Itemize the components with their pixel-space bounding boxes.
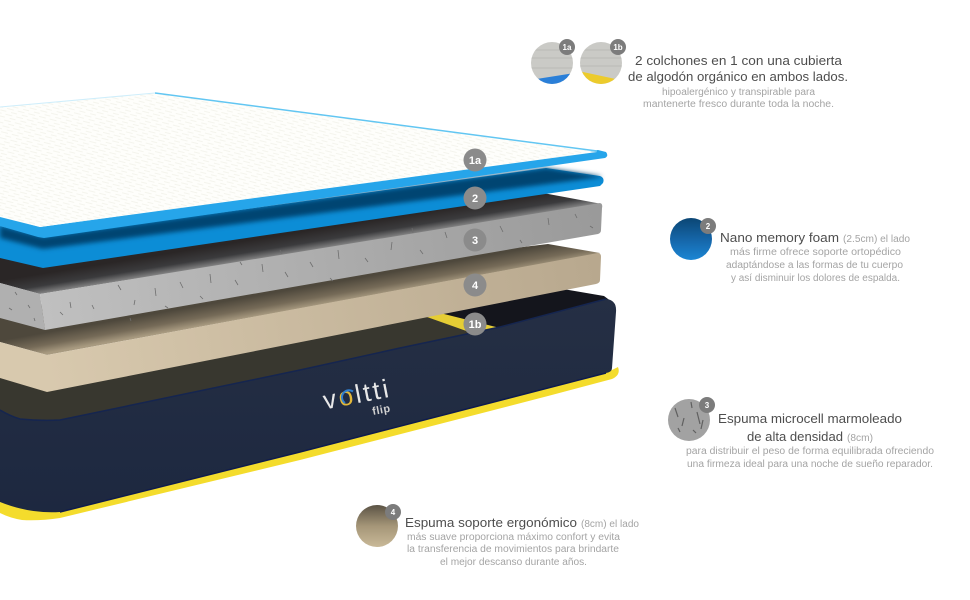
icon: cover swatch 1a: [531, 39, 575, 84]
callout text: memory foam: [720, 231, 910, 284]
callout text: microcell: Espuma microcell marmoleado: [718, 412, 902, 426]
icon: ergonomic foam swatch: 4: [391, 508, 396, 517]
marker 3: 3: [472, 235, 478, 247]
marker 1b: [464, 312, 486, 336]
icon: microcell swatch: 3: [705, 401, 710, 410]
callout text: ergonomic: la transferencia de movimientos para brindarte: [407, 544, 619, 555]
callout text: memory foam: (2.5cm) el lado: [843, 234, 910, 245]
callout text: ergonomic: más suave proporciona máximo confort y evita: [407, 532, 620, 543]
marker 4: 4: [472, 280, 479, 292]
layer 2 blue memory foam: [0, 168, 604, 268]
marker 3: [464, 228, 486, 252]
callout: ergonomic foam: [356, 504, 639, 568]
callout text: microcell: [686, 412, 934, 470]
callout: microcell foam: [668, 397, 934, 470]
marker 4: [464, 274, 486, 296]
layer 4 tan foam: [0, 244, 601, 392]
marker 1a: [464, 148, 486, 172]
base layer 1b with yellow trim: [0, 289, 619, 520]
callout text: memory foam: más firme ofrece soporte ortopédico: [730, 247, 901, 258]
callout text: cover: mantenerte fresco durante toda la noche.: [643, 99, 834, 110]
callout text: microcell: de alta densidad: [747, 430, 843, 444]
marker 2: [464, 186, 486, 210]
mattress illustration: [0, 93, 619, 520]
icon: cover swatch 1b: [580, 39, 626, 84]
icon: microcell swatch: [668, 397, 715, 441]
callout text: microcell: (8cm): [847, 433, 873, 444]
callout text: memory foam: Nano memory foam: [720, 231, 839, 245]
callout: cover 1a and 1b: [530, 39, 848, 110]
callout text: cover: 2 colchones en 1 con una cubierta: [635, 54, 842, 68]
callout text: cover: de algodón orgánico en ambos lados.: [628, 70, 848, 84]
icon: memory foam swatch: [670, 218, 716, 260]
callout text: ergonomic: (8cm) el lado: [581, 519, 639, 530]
callout text: microcell: para distribuir el peso de forma equilibrada ofreciendo: [686, 446, 934, 457]
voltti flip logo: voltti: [320, 373, 391, 415]
icon: cover swatch 1b: 1b: [613, 43, 623, 52]
icon: ergonomic foam swatch: [356, 504, 401, 547]
layer 1a white quilted cover with blue rim: [0, 93, 607, 238]
callout text: microcell: una firmeza ideal para una noche de sueño reparador.: [687, 459, 933, 470]
callout text: cover: [628, 54, 848, 110]
callout text: memory foam: y así disminuir los dolores de espalda.: [731, 273, 900, 284]
marker 2: 2: [472, 193, 478, 205]
icon: cover swatch 1a: 1a: [563, 43, 572, 52]
marker 1b: 1b: [469, 319, 482, 331]
callout text: ergonomic: Espuma soporte ergonómico: [405, 516, 577, 530]
callout text: ergonomic: [405, 516, 639, 568]
callout text: memory foam: adaptándose a las formas de tu cuerpo: [726, 260, 903, 271]
callout text: cover: hipoalergénico y transpirable para: [662, 87, 815, 98]
voltti flip logo: flip: [371, 403, 392, 418]
icon: memory foam swatch: 2: [706, 222, 711, 231]
callout text: ergonomic: el mejor descanso durante años.: [440, 557, 587, 568]
callout: nano memory foam: [670, 218, 910, 284]
layer 3 gray microcell foam: [0, 193, 602, 330]
marker 1a: 1a: [469, 155, 482, 167]
